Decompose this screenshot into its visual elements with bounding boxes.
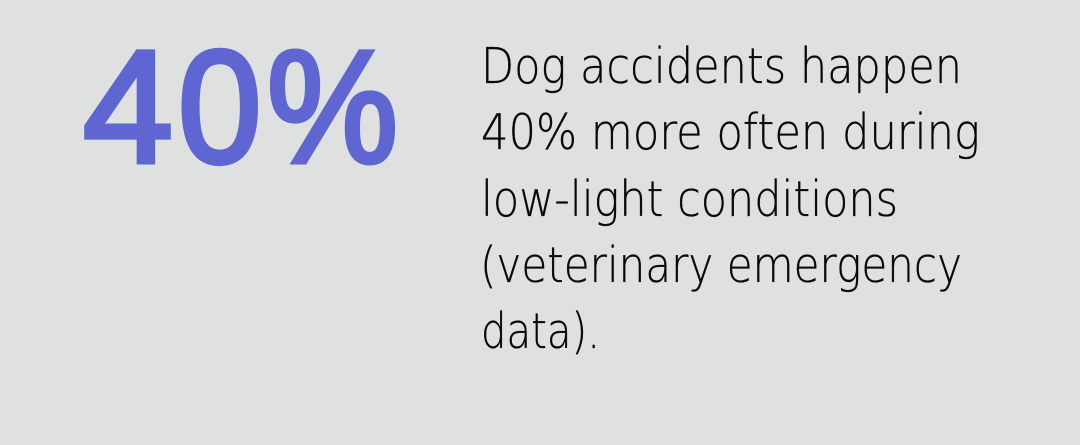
- text line 1: Dog accidents happen: [481, 38, 962, 95]
- big statistic: 40%: 0: [178, 17, 262, 196]
- text line 4: (veterinary emergency: [480, 237, 962, 294]
- text line 2: 40% more often during: [481, 104, 980, 161]
- text line 5: data).: [481, 303, 600, 360]
- text line 3: low-light conditions: [481, 171, 898, 228]
- big statistic: 40%: 4: [83, 17, 173, 196]
- description text block: [480, 38, 980, 360]
- big statistic: 40%: %: [267, 17, 398, 196]
